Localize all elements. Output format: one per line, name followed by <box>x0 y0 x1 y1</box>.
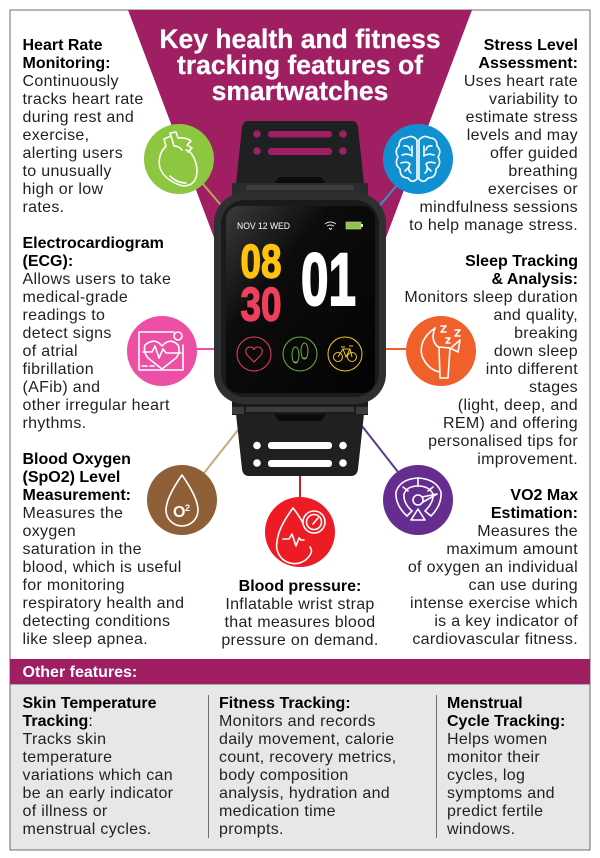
text: Skin Temperature: Skin Temperature <box>22 695 157 712</box>
icon: sleep (orange) <box>406 316 476 386</box>
connector lines <box>190 184 412 500</box>
title banner <box>128 10 472 465</box>
screen icon: bicycle <box>328 337 362 371</box>
text: Blood Oxygen: Measures the <box>22 505 123 522</box>
text: Menstrual Cycle Tracking: windows. <box>446 821 515 838</box>
text: VO2 Max: is a key indicator of <box>434 613 578 630</box>
icon: oxygen drop (brown) <box>147 465 217 535</box>
text: Sleep Tracking: & Analysis: <box>491 271 578 288</box>
text: ECG: of atrial <box>22 343 78 360</box>
screen icon: heart <box>237 337 271 371</box>
title: Key health and fitness <box>159 24 441 54</box>
text: Heart Rate Monitoring: alerting users <box>22 145 123 162</box>
text: VO2 Max: Estimation: <box>491 505 578 522</box>
text: Menstrual Cycle Tracking: cycles, log <box>447 767 525 784</box>
text: ECG: fibrillation <box>22 361 94 378</box>
text: Skin Temperature: Tracks skin <box>22 731 106 748</box>
text: Blood pressure: Blood pressure: <box>239 578 361 595</box>
text: Fitness Tracking: daily movement, calorie <box>219 731 394 748</box>
date: NOV 12 WED <box>237 221 290 231</box>
text: Fitness Tracking: count, recovery metrics, <box>219 749 397 766</box>
hour: 08 <box>240 234 282 288</box>
text: Menstrual Cycle Tracking: monitor their <box>447 749 540 766</box>
text: Fitness Tracking: prompts. <box>219 821 284 838</box>
text: ECG: readings to <box>22 307 105 324</box>
text: Sleep Tracking: and quality, <box>494 307 578 324</box>
text: Blood Oxygen: (SpO2) Level <box>22 469 120 486</box>
text: Skin Temperature: variations which can <box>22 767 173 784</box>
text: Sleep Tracking: Sleep Tracking <box>465 253 578 270</box>
wifi icon <box>325 222 336 230</box>
text: Heart Rate Monitoring: Heart Rate <box>22 37 103 54</box>
text: Blood Oxygen: respiratory health and <box>22 595 184 612</box>
text: Blood Oxygen: for monitoring <box>22 577 125 594</box>
text: Fitness Tracking: Monitors and records <box>219 713 376 730</box>
text: Skin Temperature: Tracking: <box>22 713 93 730</box>
text: Heart Rate Monitoring: rates. <box>22 199 64 216</box>
text: Fitness Tracking: analysis, hydration and <box>219 785 390 802</box>
text: Menstrual Cycle Tracking <box>446 695 565 838</box>
text: Skin Temperature: temperature <box>22 749 112 766</box>
minutes: 30 <box>240 278 282 330</box>
title: tracking features of <box>177 50 423 80</box>
text: Heart Rate Monitoring: tracks heart rate <box>22 91 144 108</box>
text: Stress Level: breathing <box>508 163 578 180</box>
text: Sleep Tracking <box>404 253 578 468</box>
icon: VO2 gauge (purple) <box>383 465 453 535</box>
text: Blood Oxygen <box>22 451 184 648</box>
text: Sleep Tracking: personalised tips for <box>428 433 578 450</box>
top strap <box>232 121 368 197</box>
text: Stress Level: estimate stress <box>466 109 578 126</box>
text: Sleep Tracking: improvement. <box>477 451 578 468</box>
text: Blood Oxygen: Measurement: <box>22 487 131 504</box>
text: Blood Oxygen: oxygen <box>22 523 76 540</box>
text: Blood pressure: pressure on demand. <box>221 632 379 649</box>
text: ECG: rhythms. <box>22 415 86 432</box>
icon: oxygen drop (brown): O <box>173 504 185 521</box>
text: Blood Oxygen: like sleep apnea. <box>22 631 148 648</box>
text: Menstrual Cycle Tracking: predict fertile <box>447 803 543 820</box>
icon: brain (blue) <box>383 124 453 194</box>
text: Fitness Tracking: Fitness Tracking: <box>219 695 351 712</box>
icon: ECG monitor (pink) <box>127 316 197 386</box>
text: Stress Level: offer guided <box>490 145 578 162</box>
text: ECG: Allows users to take <box>22 271 171 288</box>
text: Heart Rate Monitoring: during rest and <box>22 109 134 126</box>
text: VO2 Max <box>408 487 578 648</box>
text: ECG: medical-grade <box>22 289 128 306</box>
other features heading: Other features: <box>22 664 137 681</box>
text: VO2 Max: maximum amount <box>446 541 578 558</box>
text: Menstrual Cycle Tracking: Menstrual <box>447 695 523 712</box>
text: Stress Level: to help manage stress. <box>409 217 578 234</box>
text: Heart Rate Monitoring: exercise, <box>22 127 89 144</box>
text: Stress Level: mindfulness sessions <box>420 199 578 216</box>
text: Heart Rate Monitoring <box>22 37 144 216</box>
other features heading <box>10 659 590 684</box>
text: ECG: detect signs <box>22 325 112 342</box>
text: Stress Level: exercises or <box>488 181 578 198</box>
bottom strap <box>232 400 368 476</box>
text: Blood pressure <box>221 578 379 649</box>
text: Heart Rate Monitoring: to unusually <box>22 163 112 180</box>
text: ECG: Electrocardiogram <box>22 235 164 252</box>
text: Menstrual Cycle Tracking: Helps women <box>447 731 547 748</box>
title <box>159 24 441 106</box>
text: Sleep Tracking: down sleep <box>494 343 578 360</box>
text: Stress Level: Assessment: <box>478 55 578 72</box>
text: Fitness Tracking: medication time <box>219 803 336 820</box>
text: Sleep Tracking: (light, deep, and <box>458 397 578 414</box>
text: Stress Level: Uses heart rate <box>464 73 578 90</box>
battery icon <box>346 222 363 229</box>
title: smartwatches <box>212 76 388 106</box>
text: Skin Temperature: menstrual cycles. <box>22 821 152 838</box>
text: Skin Temperature: be an early indicator <box>22 785 174 802</box>
text: ECG: (AFib) and <box>22 379 100 396</box>
text: Skin Temperature <box>22 695 174 838</box>
text: VO2 Max: Measures the <box>477 523 578 540</box>
text: Skin Temperature: of illness or <box>22 803 108 820</box>
text: Blood pressure: Inflatable wrist strap <box>225 596 375 613</box>
text: Fitness Tracking <box>219 695 397 838</box>
text: ECG: (ECG): <box>22 253 73 270</box>
text: Sleep Tracking: breaking <box>514 325 578 342</box>
text: Blood Oxygen: saturation in the <box>22 541 142 558</box>
icon: oxygen drop (brown): 2 <box>185 503 190 513</box>
text: Blood pressure: that measures blood <box>224 614 376 631</box>
text: Menstrual Cycle Tracking: Cycle Tracking: <box>447 713 565 730</box>
text: Sleep Tracking: stages <box>529 379 578 396</box>
smartwatch <box>214 121 386 476</box>
text: ECG <box>22 235 171 432</box>
watch case <box>214 193 386 404</box>
text: Blood Oxygen: detecting conditions <box>22 613 170 630</box>
seconds: 01 <box>301 238 356 321</box>
text: ECG: other irregular heart <box>22 397 170 414</box>
text: Stress Level <box>409 37 578 234</box>
panel: other features <box>10 659 590 850</box>
text: VO2 Max: VO2 Max <box>510 487 578 504</box>
text: Stress Level: variability to <box>489 91 578 108</box>
text: VO2 Max: of oxygen an individual <box>408 559 578 576</box>
watch screen <box>226 206 375 393</box>
text: Sleep Tracking: into different <box>486 361 578 378</box>
text: Blood Oxygen: blood, which is useful <box>22 559 182 576</box>
icon: heart (green) <box>144 124 214 194</box>
screen icon: footsteps <box>283 337 317 371</box>
text: Heart Rate Monitoring: Continuously <box>22 73 119 90</box>
text: Fitness Tracking: body composition <box>219 767 349 784</box>
text: Stress Level: levels and may <box>467 127 578 144</box>
text: VO2 Max: can use during <box>469 577 578 594</box>
text: Blood Oxygen: Blood Oxygen <box>22 451 131 468</box>
text: VO2 Max: intense exercise which <box>410 595 578 612</box>
text: Heart Rate Monitoring: high or low <box>22 181 104 198</box>
text: Sleep Tracking: Monitors sleep duration <box>404 289 578 306</box>
text: Sleep Tracking: REM) and offering <box>443 415 578 432</box>
icon: blood pressure (red) <box>265 497 335 567</box>
text: Menstrual Cycle Tracking: symptoms and <box>447 785 555 802</box>
text: VO2 Max: cardiovascular fitness. <box>412 631 578 648</box>
text: Heart Rate Monitoring: Monitoring: <box>22 55 110 72</box>
text: Stress Level: Stress Level <box>484 37 578 54</box>
